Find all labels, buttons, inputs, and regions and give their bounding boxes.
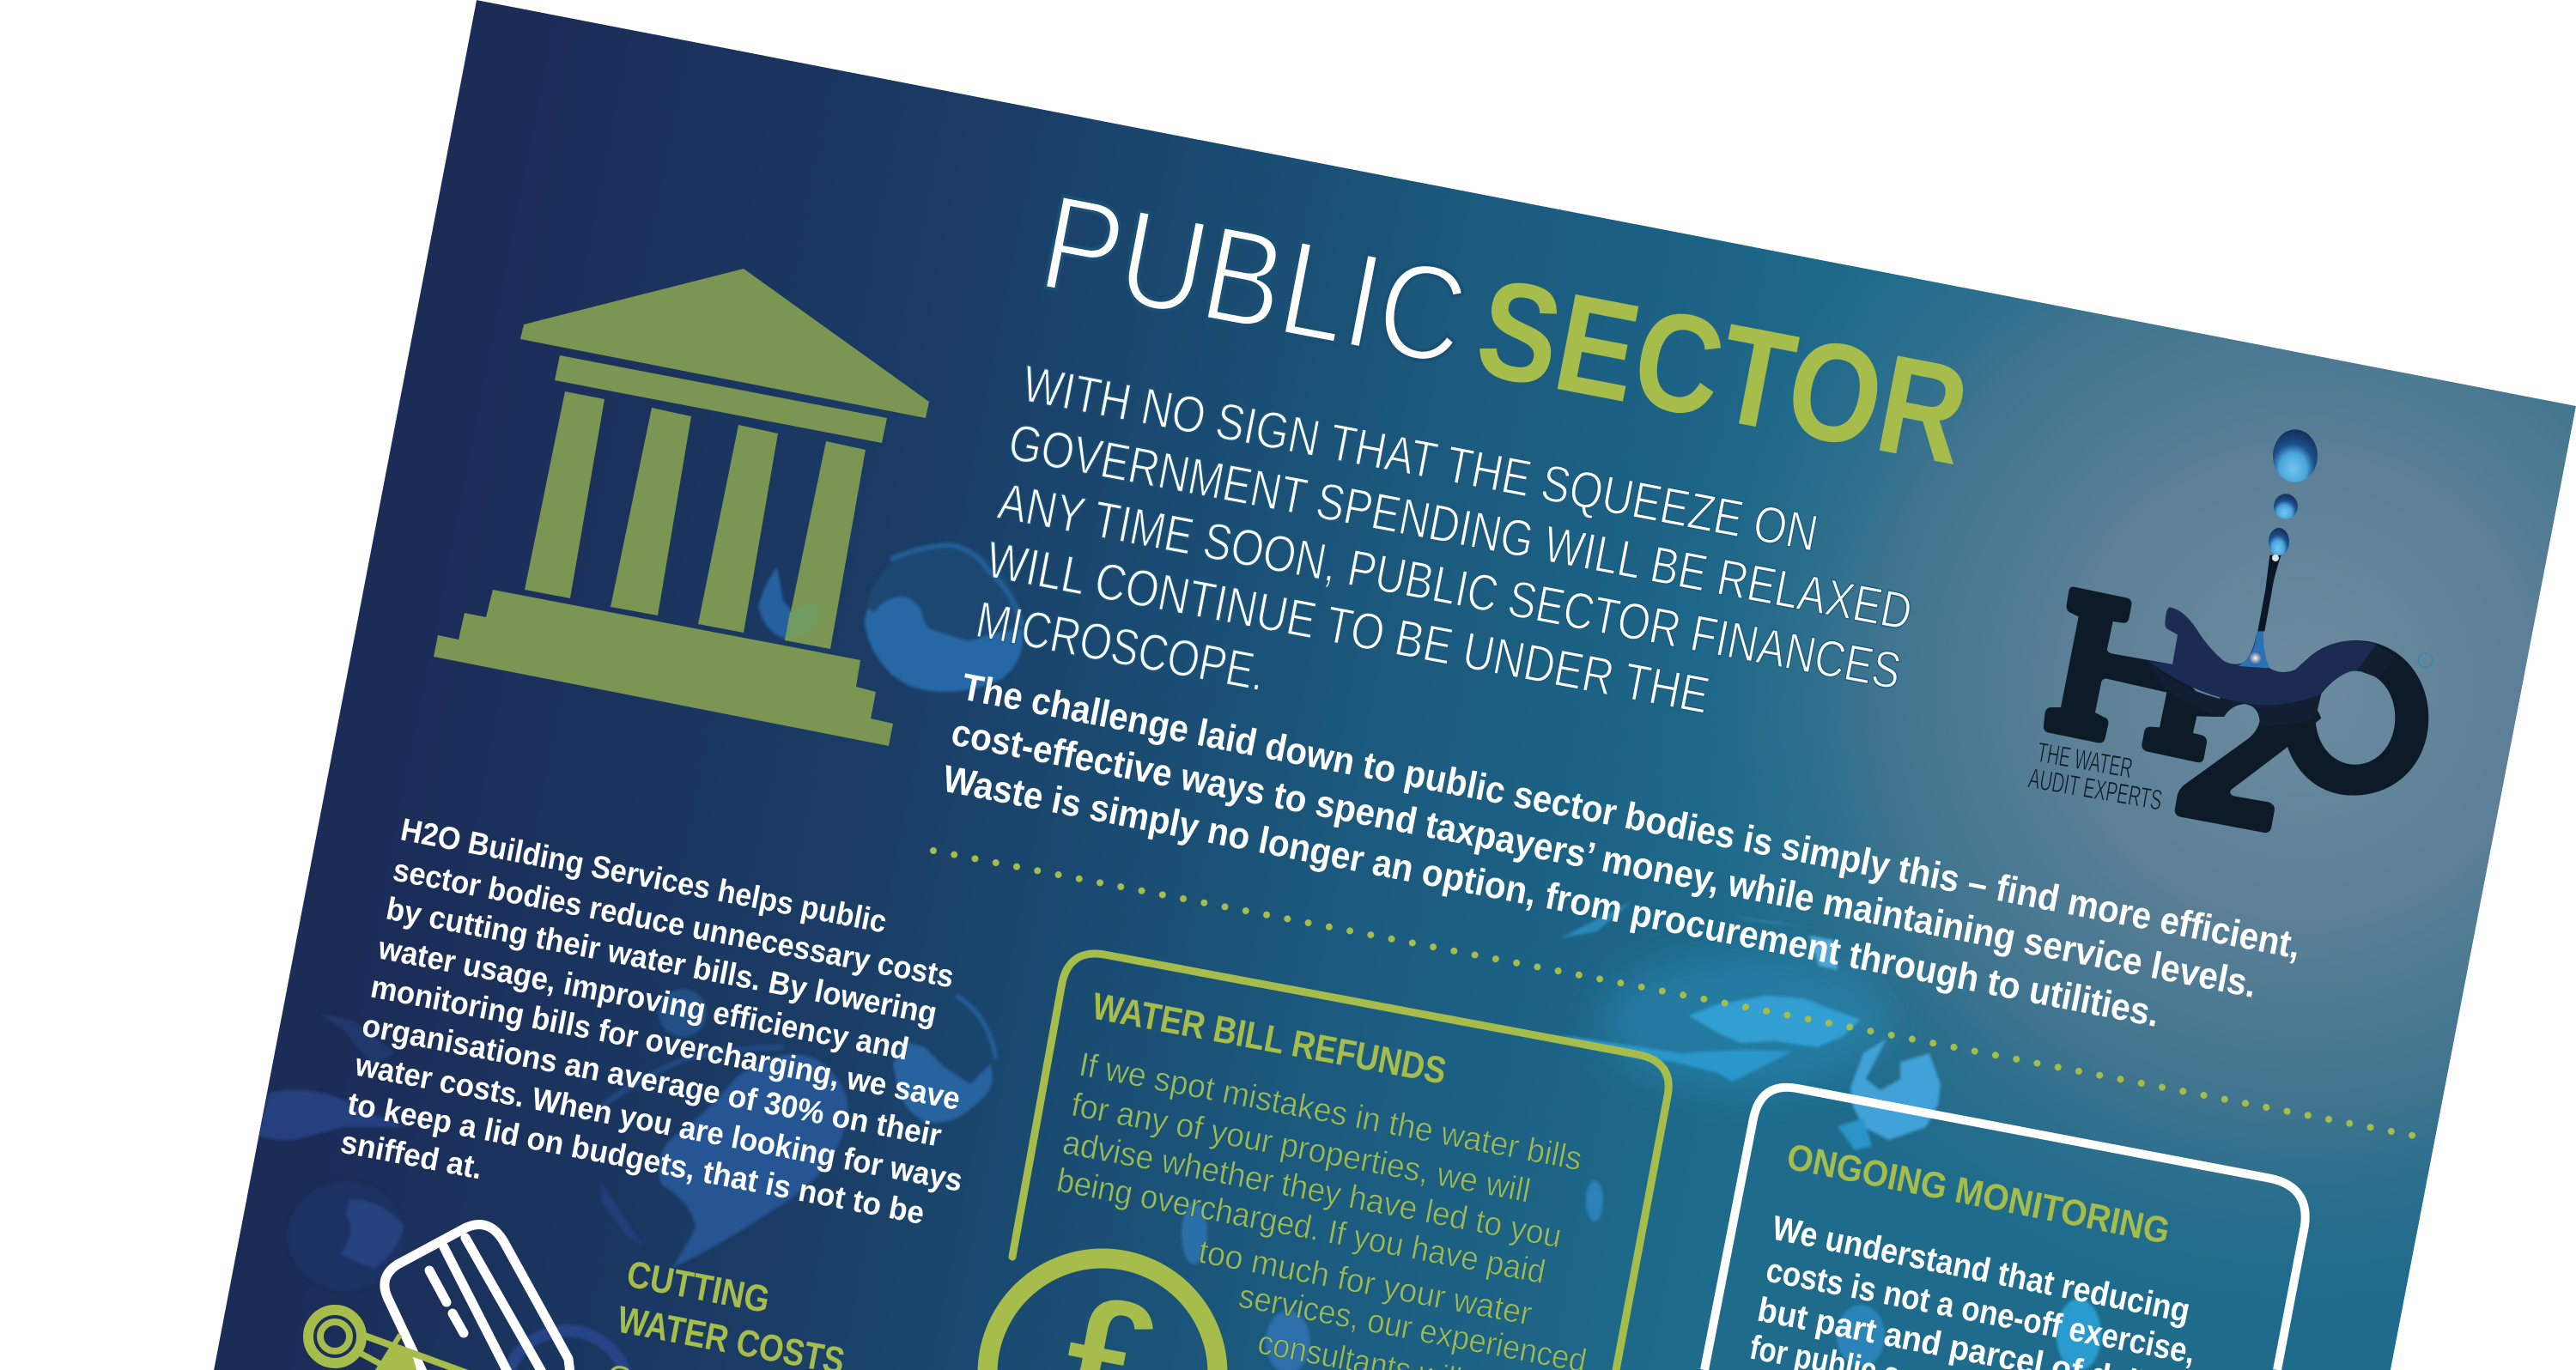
bold challenge statement: The challenge laid down to public sector bodies is simply this – find more efficient, [958,666,2304,967]
left intro paragraph: monitoring bills for overcharging, we save [368,969,963,1117]
body text: water bill refunds: for any of your properties, we will [1068,1087,1534,1210]
left intro paragraph [337,812,965,1231]
panel: ongoing monitoring [1704,1088,2306,1370]
intro text: capitals: WITH NO SIGN THAT THE SQUEEZE ON [1018,355,1822,562]
title: public sector: PUBLIC [1030,167,1478,395]
left intro paragraph: to keep a lid on budgets, that is not to be [344,1086,927,1231]
body text: water bill refunds [1054,1046,1589,1370]
title: public sector [1043,194,1963,464]
logo tagline: THE WATER [2035,736,2136,784]
letter H [2044,587,2218,762]
bold challenge statement: cost-effective ways to spend taxpayers’ money, while maintaining service levels. [948,712,2260,1006]
intro text: capitals: WILL CONTINUE TO BE UNDER THE [982,530,1714,724]
body text: ongoing monitoring: We understand that reducing [1769,1209,2193,1331]
icon: pound coin [987,1258,1218,1370]
heading: water bill refunds: WATER BILL REFUNDS [1089,985,1449,1093]
body text: water bill refunds: advise whether they have led to you [1060,1124,1564,1255]
water drops [2273,429,2318,482]
water splash halo [1600,953,1892,1090]
left intro paragraph: sector bodies reduce unnecessary costs [390,852,957,994]
intro text: capitals: ANY TIME SOON, PUBLIC SECTOR FINANCES [994,472,1905,700]
title: public sector: SECTOR [1466,248,1980,494]
logo tagline: AUDIT EXPERTS [2026,761,2165,816]
cutting water costs section [308,1224,848,1370]
left intro paragraph: sniffed at. [337,1124,485,1185]
shaded band [2148,661,2321,725]
body text: water bill refunds: too much for your water [1195,1234,1534,1333]
panel outline: water bill refunds [1012,954,1668,1370]
intro text: capitals [972,355,1917,724]
body text: water bill refunds: If we spot mistakes in the water bills [1076,1046,1585,1178]
registered mark [2418,653,2433,668]
icon: temple building [434,269,929,746]
bold challenge statement: Waste is simply no longer an option, from procurement through to utilities. [939,758,2163,1035]
water splash bubbles background [258,545,2101,1370]
left intro paragraph: water costs. When you are looking for ways [352,1046,965,1198]
numeral 2 [2175,681,2321,833]
heading: cutting water costs: CUTTING [623,1253,773,1321]
logo: H2O [2026,429,2433,833]
left intro paragraph: organisations an average of 30% on their [359,1008,945,1154]
left intro paragraph: water usage, improving efficiency and [375,930,912,1067]
letter O [2282,640,2428,796]
intro text: capitals: GOVERNMENT SPENDING WILL BE RELAXED [1005,413,1917,641]
left intro paragraph: by cutting their water bills. By lowering [383,891,939,1031]
intro text: capitals: MICROSCOPE. [972,591,1270,702]
water wave [2148,607,2376,706]
logo tagline [2026,736,2165,816]
heading: ongoing monitoring: ONGOING MONITORING [1783,1137,2173,1252]
panel: water bill refunds [987,954,1668,1370]
body text: water bill refunds: being overcharged. If you have paid [1054,1162,1548,1291]
left intro paragraph: H2O Building Services helps public [398,812,890,940]
icon: water meter [385,1224,570,1370]
panel outline: ongoing monitoring [1704,1088,2306,1370]
dotted divider [933,851,2418,1137]
icon: green valve [308,1310,468,1370]
heading: cutting water costs [614,1253,848,1370]
logo mark: H2O letters and water drops [2044,429,2433,833]
